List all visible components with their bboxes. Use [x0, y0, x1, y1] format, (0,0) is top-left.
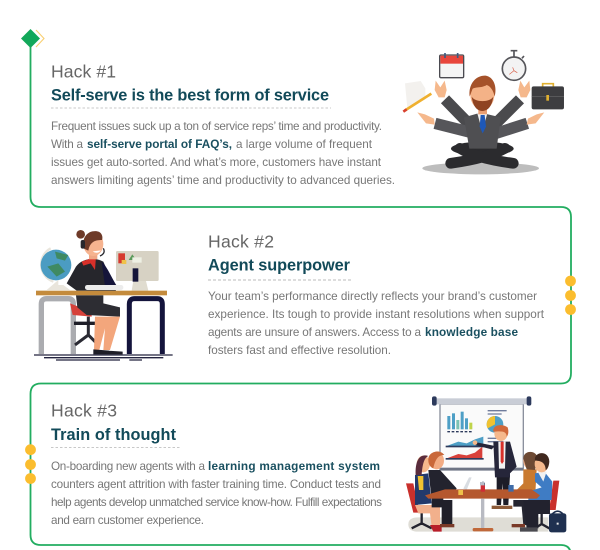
text block: hack 1 — [51, 120, 395, 187]
figure: businessman — [417, 76, 544, 163]
illustration: call centre agent — [34, 230, 173, 360]
figure: presenter — [473, 425, 517, 509]
text block: hack 3: learning management system — [208, 459, 380, 473]
text block: hack 3 — [51, 459, 382, 527]
heading: hack 3: Hack #3 — [51, 400, 117, 420]
text block: hack 1: a large volume of frequent — [236, 138, 373, 151]
text block: hack 2: fosters fast and effective resolution. — [208, 344, 391, 357]
text block: hack 1: With a — [51, 138, 83, 151]
text block: hack 3: and earn customer experience. — [51, 514, 204, 527]
figure: agent — [67, 230, 123, 354]
text block: hack 1: answers limiting agents’ time and productivity to advanced queries. — [51, 174, 395, 187]
panel: hack 3 — [51, 400, 382, 527]
desk — [34, 291, 173, 360]
panel: hack 2 — [208, 232, 545, 357]
figure: left attendees — [406, 451, 472, 532]
text block: hack 1: issues get auto-sorted. And what’s more, customers have instant — [51, 156, 382, 169]
icon: briefcase — [532, 84, 564, 109]
title: hack 2: Agent superpower — [208, 256, 351, 274]
title: hack 1: Self-serve is the best form of service — [51, 86, 329, 104]
icon: calendar — [440, 53, 464, 78]
text block: hack 2 — [208, 290, 545, 357]
panel: hack 1 — [51, 62, 395, 187]
bar chart — [447, 412, 472, 432]
text block: hack 3: help agents develop unmatched service know-how. Fulfill expectations — [51, 496, 382, 509]
illustration: training meeting — [406, 396, 566, 532]
text block: hack 2: knowledge base — [425, 325, 518, 339]
icon: stopwatch — [502, 51, 526, 80]
heading: hack 2: Hack #2 — [208, 232, 274, 252]
icon: paper and pencil — [403, 81, 431, 112]
text block: hack 3: On-boarding new agents with a — [51, 460, 205, 473]
figure: right attendees — [512, 452, 559, 532]
pie chart — [487, 411, 507, 442]
text block: hack 3: counters agent attrition with faster training time. Conduct tests and — [51, 478, 381, 491]
icon: yellow dots left — [25, 444, 36, 484]
text block: hack 2: Your team’s performance directly reflects your brand’s customer — [208, 290, 537, 303]
icon: start diamond — [21, 29, 44, 48]
title: hack 3: Train of thought — [51, 426, 177, 444]
presentation screen — [432, 396, 531, 470]
text block: hack 1: self-serve portal of FAQ’s, — [87, 137, 232, 151]
text block: hack 1: Frequent issues suck up a ton of service reps’ time and productivity. — [51, 120, 382, 133]
icon: bag — [549, 511, 566, 532]
area charts — [446, 437, 484, 460]
icon: yellow dots right — [565, 276, 576, 315]
icon: monitor — [116, 251, 159, 291]
text block: hack 2: experience. Its tough to provide instant resolutions when support — [208, 308, 545, 321]
illustration: meditating businessman — [403, 51, 564, 174]
text block: hack 2: agents are unsure of answers. Access to a — [208, 326, 421, 339]
table — [425, 481, 540, 531]
icon: globe — [41, 248, 71, 290]
heading: hack 1: Hack #1 — [51, 62, 116, 82]
